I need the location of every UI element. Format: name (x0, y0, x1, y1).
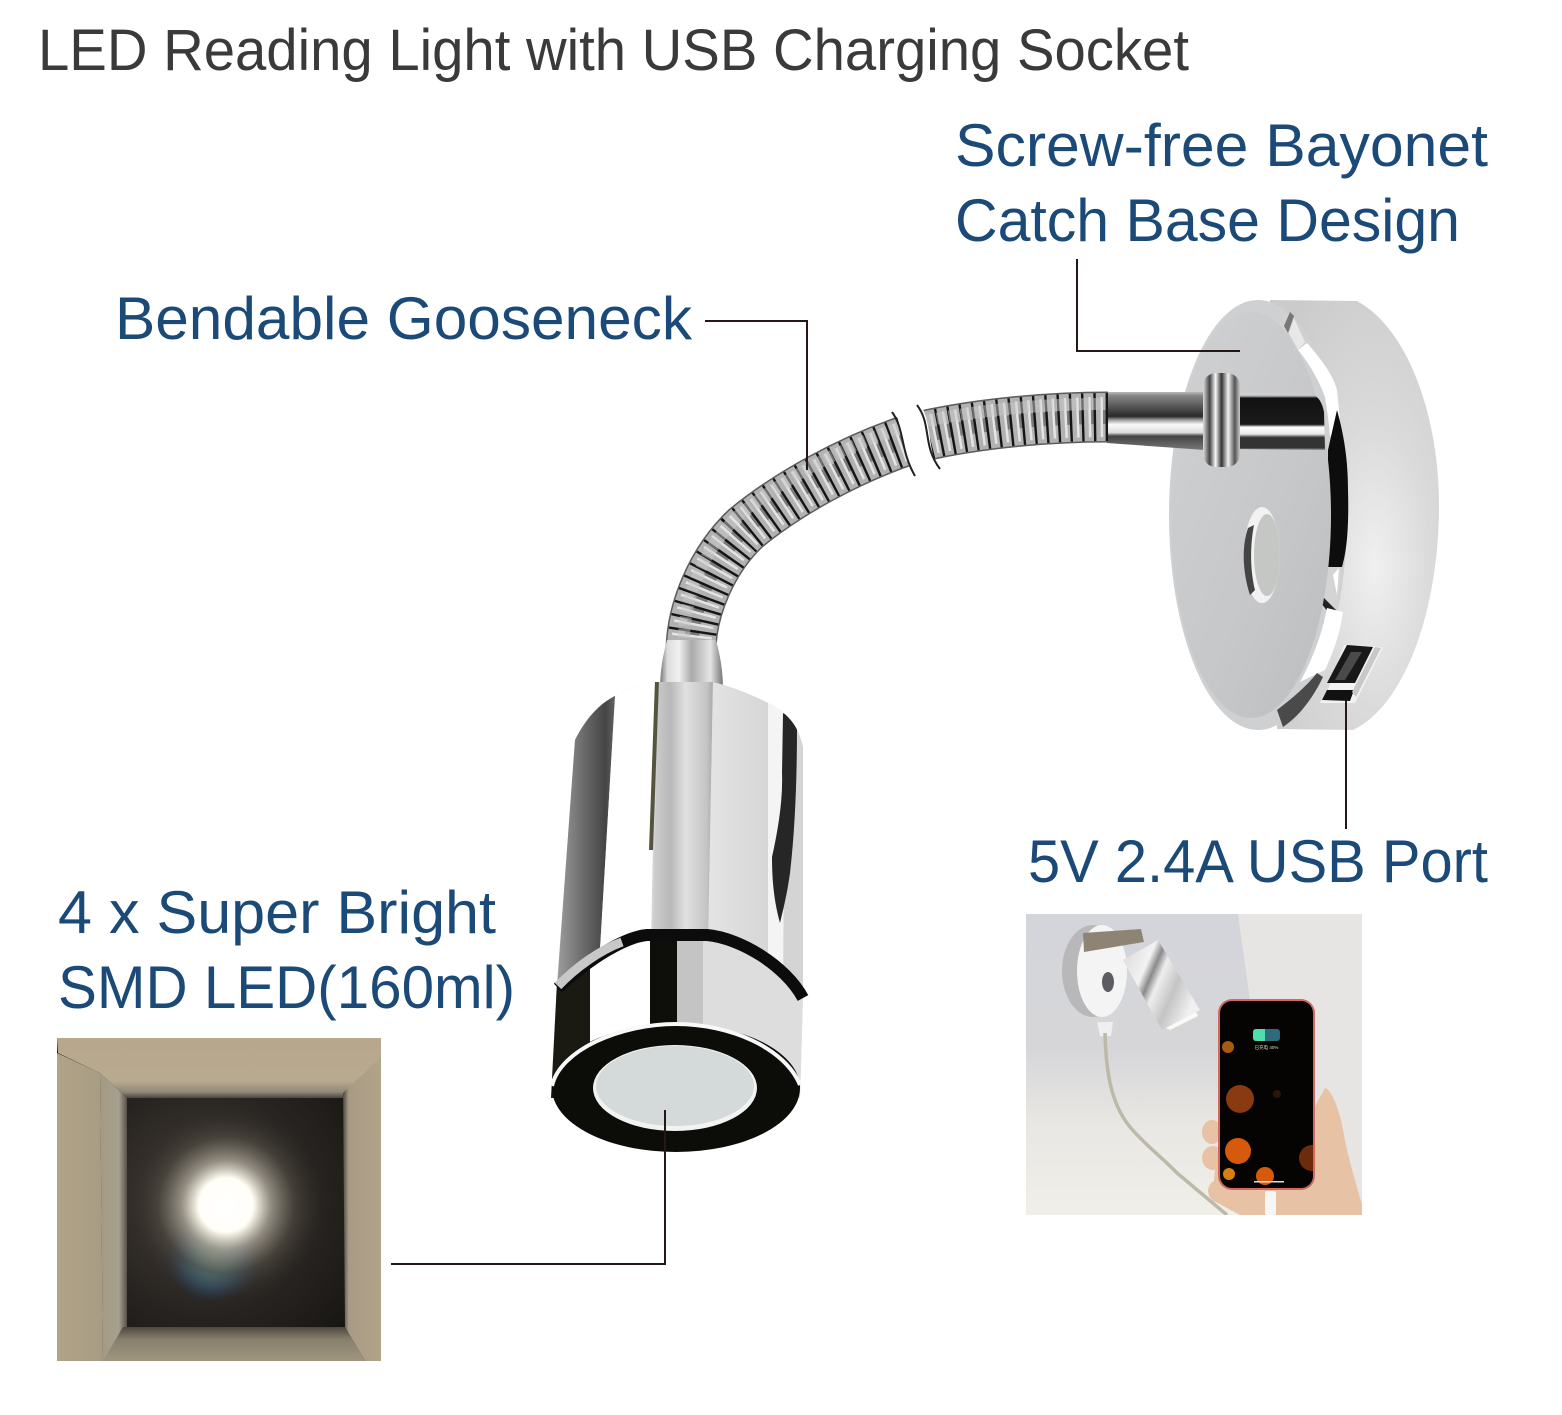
bright light (151, 1126, 308, 1292)
chrome reflection (1323, 567, 1342, 610)
groove (558, 935, 803, 998)
front ring (552, 1024, 800, 1152)
lens (593, 1045, 757, 1131)
lower white crescent (1300, 608, 1343, 682)
lower ring (551, 940, 803, 1098)
battery indicator (1253, 1029, 1280, 1041)
leader lines (391, 259, 1346, 1264)
dark tube section (1238, 393, 1325, 450)
left wall (57, 1053, 103, 1361)
bottom wall (103, 1327, 365, 1361)
mini lamp head (1123, 940, 1200, 1030)
label: super bright SMD LED: SMD LED(160ml) (58, 954, 515, 1021)
collar (1203, 373, 1240, 467)
cylinder body (556, 682, 803, 998)
lens flare (170, 1238, 250, 1300)
label: super bright SMD LED: 4 x Super Bright (58, 879, 496, 946)
touch switch (1244, 507, 1280, 603)
upper white crescent (1298, 343, 1340, 437)
mini lamp base (1062, 925, 1144, 1036)
chrome ring around front face (1169, 300, 1347, 730)
right wall (343, 1057, 381, 1361)
label: bendable gooseneck: Bendable Gooseneck (115, 285, 693, 352)
inner left wall (100, 1073, 127, 1361)
mount tube (1107, 392, 1205, 450)
wall mount base (1107, 300, 1439, 730)
base side rim (1270, 300, 1439, 730)
charging plug (1265, 1191, 1276, 1215)
label: USB port: 5V 2.4A USB Port (1028, 828, 1488, 895)
dark crescent (1328, 410, 1348, 567)
wallpaper bubbles (1222, 1041, 1313, 1185)
label: screw-free bayonet catch base design: Catch Base Design (955, 187, 1460, 254)
label: super bright SMD LED (58, 879, 515, 1021)
right wall panel (1238, 914, 1362, 1215)
photo: phone charging (1026, 914, 1362, 1215)
front face disc (1171, 312, 1331, 718)
phone (1218, 999, 1325, 1190)
charging text: 已充电 40% (1255, 1044, 1278, 1051)
label: screw-free bayonet catch base design (955, 112, 1488, 254)
break in the gooseneck (892, 398, 942, 480)
lower dark reflection (1277, 673, 1323, 727)
photo: LED in box (57, 1038, 381, 1361)
top wall (57, 1038, 381, 1098)
title: LED Reading Light with USB Charging Socket (38, 18, 1189, 83)
gooseneck (684, 398, 1108, 652)
neck (660, 640, 723, 690)
lamp head (540, 640, 810, 1152)
cable (1105, 1033, 1227, 1215)
USB port (1320, 645, 1383, 703)
hand (1202, 1088, 1362, 1215)
label: screw-free bayonet catch base design: Screw-free Bayonet (955, 112, 1488, 179)
